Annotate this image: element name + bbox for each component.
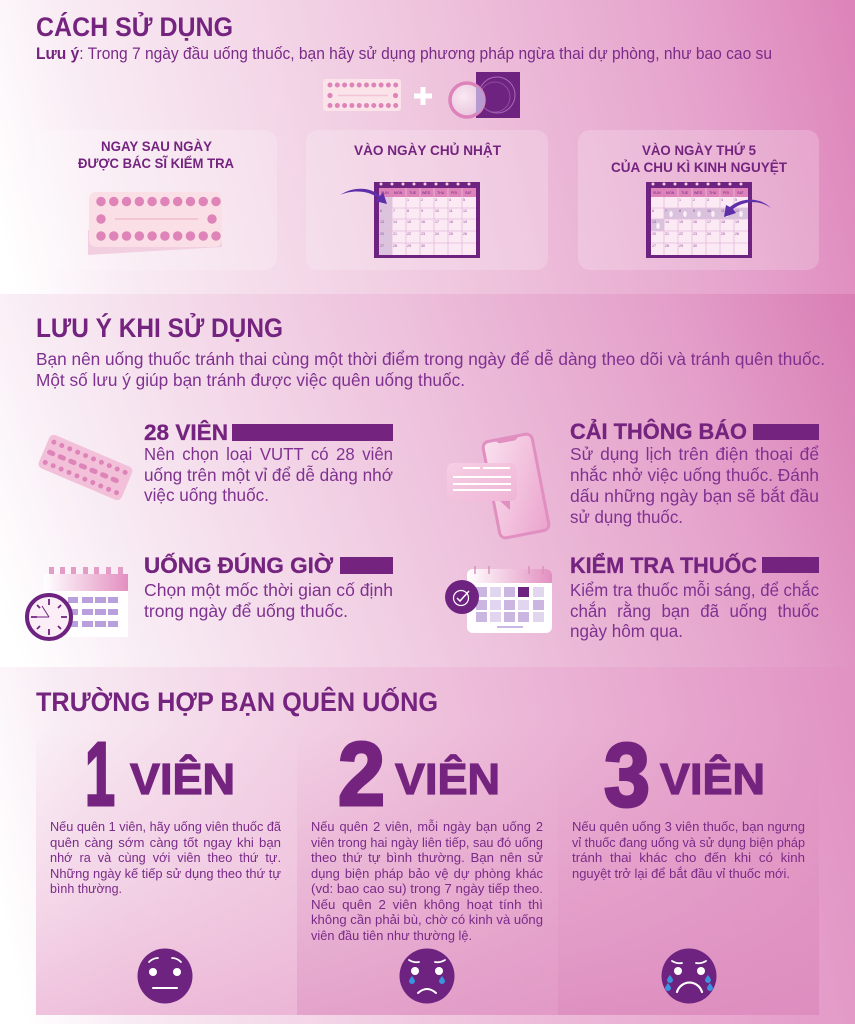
item heading: CẢI THÔNG BÁO bbox=[570, 419, 747, 444]
icon: calendar with period days marked: 25 bbox=[721, 232, 725, 236]
icon: calendar with sunday marked: 28 bbox=[393, 244, 397, 248]
icon: calendar with period days marked: TUE bbox=[681, 191, 689, 195]
icon: calendar with sunday marked: 2 bbox=[421, 198, 423, 202]
item text: dấu những ngày bạn sẽ bắt đầu bbox=[570, 485, 819, 506]
item text bbox=[144, 580, 393, 621]
icon: calendar with period days marked: 21 bbox=[665, 232, 669, 236]
icon: calendar with period days marked: 27 bbox=[652, 244, 656, 248]
icon: calendar with sunday marked: 25 bbox=[449, 232, 453, 236]
heading bar bbox=[762, 557, 819, 573]
item text: Nên chọn loại VUTT có 28 viên bbox=[144, 444, 393, 464]
panel text bbox=[50, 819, 282, 896]
big number 3: 3 bbox=[604, 726, 650, 826]
arrow: to sunday bbox=[340, 189, 387, 204]
section background: notes bbox=[0, 294, 855, 667]
icon: calendar with sunday marked: 20 bbox=[380, 232, 384, 236]
heading bar bbox=[753, 424, 819, 440]
icon: plus bbox=[414, 87, 432, 105]
icon: calendar with period days marked: SUN bbox=[653, 191, 661, 195]
panel text: Nếu quên 2 viên không hoạt tính thì bbox=[311, 897, 543, 912]
card title: NGAY SAU NGÀY bbox=[101, 138, 213, 154]
icon: calendar with sunday marked: SAT bbox=[465, 191, 473, 195]
panel text: Nếu quên uống 3 viên thuốc, bạn ngưng bbox=[572, 819, 805, 834]
icon: calendar with period days marked: WED bbox=[694, 191, 703, 195]
icon: calendar with sunday marked: 17 bbox=[435, 220, 439, 224]
icon: calendar with period days marked: 1 bbox=[679, 198, 681, 202]
icon: calendar with sunday marked: 24 bbox=[435, 232, 439, 236]
icon: calendar with period days marked: 18 bbox=[721, 220, 725, 224]
panel text: nhớ ra và cùng với viên theo thứ tự. bbox=[50, 850, 281, 865]
icon: calendar with sunday marked: 15 bbox=[407, 220, 411, 224]
icon: calendar with sunday marked: 12 bbox=[463, 209, 467, 213]
intro paragraph bbox=[36, 348, 825, 390]
icon: calendar with sunday marked: 23 bbox=[421, 232, 425, 236]
big number 1: 1 bbox=[85, 725, 115, 825]
icon: calendar with period days marked: 22 bbox=[679, 232, 683, 236]
icon: calendar with sunday marked: TUE bbox=[409, 191, 417, 195]
heading bar bbox=[340, 557, 393, 574]
icon: calendar with period days marked: 17 bbox=[707, 220, 711, 224]
icon: calendar with period days marked: 16 bbox=[693, 220, 697, 224]
panel text: không cần phải bù, chờ có kinh và uống bbox=[311, 912, 543, 927]
heading bar bbox=[232, 424, 393, 441]
panel text bbox=[572, 819, 805, 881]
icon: calendar with check bbox=[445, 566, 552, 633]
item heading: 28 VIÊN bbox=[144, 420, 228, 445]
icon: calendar with period days marked: 12 bbox=[735, 209, 739, 213]
panel text: tránh thai khác cho đến khi có kinh bbox=[572, 850, 805, 865]
icon: calendar with sunday marked: 14 bbox=[393, 220, 397, 224]
panel text: (vd: bao cao su) trong 7 ngày tiếp theo. bbox=[311, 881, 543, 896]
panel text: Nếu quên 2 viên, mỗi ngày bạn uống 2 bbox=[311, 819, 543, 834]
intro paragraph: Bạn nên uống thuốc tránh thai cùng một thời điểm trong ngày để dễ dàng theo dõi và tránh quên thuốc. bbox=[36, 348, 825, 369]
icon: calendar with period days marked: 29 bbox=[679, 244, 683, 248]
section: if you miss pills bbox=[36, 685, 819, 1015]
item text: chắn rằng bạn đã uống thuốc bbox=[570, 600, 819, 621]
icon: calendar with period days marked: 19 bbox=[735, 220, 739, 224]
arrow: to day 5 bbox=[724, 200, 771, 217]
icon: pill pack large bbox=[88, 192, 222, 255]
heading: how to use: CÁCH SỬ DỤNG bbox=[36, 10, 233, 42]
panel text bbox=[311, 819, 543, 943]
item: check pills bbox=[445, 552, 819, 641]
section background: usage bbox=[0, 0, 855, 294]
icon: calendar with sunday marked: 6 bbox=[380, 209, 382, 213]
card title bbox=[78, 138, 234, 171]
panel text: quên càng sớm càng tốt ngay khi bạn bbox=[50, 835, 281, 850]
card: sunday bbox=[306, 130, 548, 270]
icon: calendar with period days marked: THU bbox=[709, 191, 717, 195]
icon: calendar with period days marked: 5 bbox=[735, 198, 737, 202]
icon: calendar with period days marked: 23 bbox=[693, 232, 697, 236]
icon: calendar with period days marked: 4 bbox=[721, 198, 723, 202]
icon: calendar with period days marked: MON bbox=[666, 191, 675, 195]
icon: calendar with sunday marked: 7 bbox=[393, 209, 395, 213]
section: how to use bbox=[36, 10, 819, 270]
icon: calendar with period days marked: 30 bbox=[693, 244, 697, 248]
icon: calendar with period days marked: 8 bbox=[679, 209, 681, 213]
note text: Lưu ý: Trong 7 ngày đầu uống thuốc, bạn hãy sử dụng phương pháp ngừa thai dự phòng, như bao cao su bbox=[36, 44, 772, 63]
card: after doctor check bbox=[36, 130, 277, 270]
item text: Sử dụng lịch trên điện thoại để bbox=[570, 444, 819, 464]
icon: calendar with period days marked: 28 bbox=[665, 244, 669, 248]
icon: calendar with sunday marked: THU bbox=[437, 191, 445, 195]
icon: calendar with period days marked: SAT bbox=[737, 191, 745, 195]
icon: calendar with sunday marked: WED bbox=[422, 191, 431, 195]
icon: condom bbox=[450, 72, 520, 118]
icon: calendar with period days marked: 26 bbox=[735, 232, 739, 236]
icon: calendar with period days marked: 14 bbox=[665, 220, 669, 224]
icon: calendar with period days marked: 9 bbox=[693, 209, 695, 213]
panel text: bình thường. bbox=[50, 881, 122, 896]
icon: calendar with period days marked: 15 bbox=[679, 220, 683, 224]
icon: tilted pill pack bbox=[37, 433, 134, 502]
icon: calendar with period days marked: 20 bbox=[652, 232, 656, 236]
item text bbox=[570, 444, 819, 527]
icon: calendar with sunday marked: 30 bbox=[421, 244, 425, 248]
panel text: nguyệt trở lại để bắt đầu vỉ thuốc mới. bbox=[572, 866, 790, 881]
card: day 5 of cycle bbox=[578, 130, 819, 270]
label: pills: VIÊN bbox=[395, 754, 500, 804]
icon: calendar with sunday marked: FRI bbox=[451, 191, 457, 195]
item text: Chọn một mốc thời gian cố định bbox=[144, 580, 393, 600]
icon: pill pack small bbox=[323, 79, 401, 111]
panel: 1 pill bbox=[36, 725, 297, 1015]
item text: uống trên một vỉ để dễ dàng nhớ bbox=[144, 464, 393, 485]
panel text: theo thứ tự bình thường. Bạn nên sử bbox=[311, 850, 543, 865]
panel: 2 pills bbox=[297, 725, 558, 1015]
panel text: viên trong hai ngày liên tiếp, sau đó uống bbox=[311, 835, 543, 850]
item text: nhắc nhở việc uống thuốc. Đánh bbox=[570, 464, 819, 485]
icon: crying face bbox=[662, 948, 716, 1004]
item text bbox=[144, 444, 393, 505]
label: pills: VIÊN bbox=[660, 754, 765, 804]
item text bbox=[570, 579, 819, 641]
label: pills: VIÊN bbox=[130, 754, 235, 804]
icon: calendar with sunday marked: MON bbox=[394, 191, 403, 195]
icon: calendar and clock bbox=[27, 567, 128, 639]
icon: calendar with sunday marked: 27 bbox=[380, 244, 384, 248]
heading: missed pills: TRƯỜNG HỢP BẠN QUÊN UỐNG bbox=[36, 685, 438, 717]
icon: calendar with sunday marked: 9 bbox=[421, 209, 423, 213]
icon: calendar with sunday marked: 26 bbox=[463, 232, 467, 236]
item text: trong ngày để uống thuốc. bbox=[144, 601, 348, 621]
icon: calendar with period days marked: 24 bbox=[707, 232, 711, 236]
icon: worried face bbox=[138, 948, 192, 1004]
panel text: viên đầu tiên như thường lệ. bbox=[311, 928, 472, 943]
icon: calendar with sunday marked: SUN bbox=[381, 191, 389, 195]
icon: calendar with sunday marked bbox=[374, 182, 480, 258]
panel text: vỉ thuốc đang uống và sử dụng biện pháp bbox=[572, 835, 805, 850]
icon: calendar with sunday marked: 8 bbox=[407, 209, 409, 213]
icon: calendar with period days marked: 3 bbox=[707, 198, 709, 202]
card title: ĐƯỢC BÁC SĨ KIỂM TRA bbox=[78, 154, 234, 171]
icon: calendar with period days marked: 6 bbox=[652, 209, 654, 213]
icon: calendar with period days marked: 11 bbox=[721, 209, 725, 213]
item text: sử dụng thuốc. bbox=[570, 507, 683, 527]
icon: calendar with sunday marked: 21 bbox=[393, 232, 397, 236]
card title: VÀO NGÀY THỨ 5 bbox=[642, 141, 756, 158]
item heading: KIỂM TRA THUỐC bbox=[570, 552, 757, 578]
item text: việc uống thuốc. bbox=[144, 485, 269, 505]
section background: missed pills bbox=[0, 667, 855, 1024]
icon: calendar with sunday marked: 4 bbox=[449, 198, 451, 202]
icon: calendar with period days marked: FRI bbox=[723, 191, 729, 195]
icon: calendar with sunday marked: 10 bbox=[435, 209, 439, 213]
icon: face with tears bbox=[400, 948, 454, 1004]
card title bbox=[611, 141, 787, 175]
item heading: UỐNG ĐÚNG GIỜ bbox=[144, 552, 333, 578]
icon: calendar with period days marked: 7 bbox=[665, 209, 667, 213]
icon: calendar with sunday marked: 5 bbox=[463, 198, 465, 202]
icon: calendar with sunday marked: 22 bbox=[407, 232, 411, 236]
icon: calendar with period days marked: 2 bbox=[693, 198, 695, 202]
icon: calendar with sunday marked: 19 bbox=[463, 220, 467, 224]
icon: calendar with sunday marked: 18 bbox=[449, 220, 453, 224]
icon: phone with message bbox=[447, 433, 550, 539]
icon: calendar with period days marked: 10 bbox=[707, 209, 711, 213]
icon: calendar with sunday marked: 3 bbox=[435, 198, 437, 202]
item: 28 pills bbox=[37, 420, 393, 505]
heading: notes: LƯU Ý KHI SỬ DỤNG bbox=[36, 311, 283, 343]
intro paragraph: Một số lưu ý giúp bạn tránh được việc quên uống thuốc. bbox=[36, 370, 465, 390]
panel text: dụng biện pháp bảo vệ dự phòng khác bbox=[311, 866, 543, 881]
item text: Kiểm tra thuốc mỗi sáng, để chắc bbox=[570, 579, 819, 600]
icon: calendar with sunday marked: 13 bbox=[380, 220, 384, 224]
panel text: Nếu quên 1 viên, hãy uống viên thuốc đã bbox=[50, 819, 282, 834]
section: notes when using bbox=[27, 311, 825, 641]
big number 2: 2 bbox=[338, 725, 385, 825]
icon: calendar with sunday marked: 1 bbox=[407, 198, 409, 202]
item text: ngày hôm qua. bbox=[570, 621, 683, 641]
card title: CỦA CHU KÌ KINH NGUYỆT bbox=[611, 158, 787, 175]
item: on time bbox=[27, 552, 393, 639]
icon: calendar with sunday marked: 16 bbox=[421, 220, 425, 224]
icon: calendar with period days marked bbox=[646, 182, 752, 258]
icon: calendar with sunday marked: 29 bbox=[407, 244, 411, 248]
panel text: Những ngày kế tiếp sử dụng theo thứ tự bbox=[50, 866, 281, 881]
item: notifications bbox=[447, 419, 819, 539]
icon: calendar with period days marked: 13 bbox=[652, 220, 656, 224]
icon: calendar with sunday marked: 11 bbox=[449, 209, 453, 213]
card title: VÀO NGÀY CHỦ NHẬT bbox=[354, 141, 501, 158]
panel: 3 pills bbox=[558, 725, 819, 1015]
